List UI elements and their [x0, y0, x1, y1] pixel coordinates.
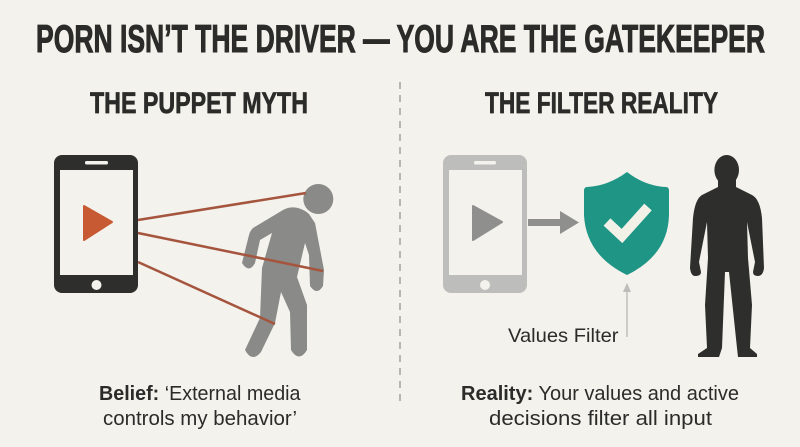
- heading: the filter reality: THE FILTER REALITY: [485, 87, 718, 120]
- heading: the puppet myth: THE PUPPET MYTH: [90, 87, 308, 120]
- caption: reality: decisions filter all input: [489, 408, 712, 430]
- caption: belief: controls my behavior’: [103, 408, 297, 430]
- panel: the puppet myth: [54, 87, 333, 430]
- arrow: phone to shield: [528, 211, 579, 234]
- icon: faded phone: [443, 155, 527, 293]
- caption: belief: [99, 383, 301, 430]
- caption: belief: Belief: ‘External media: [99, 383, 301, 405]
- icon: dark standing figure: [690, 155, 764, 357]
- label: values filter: Values Filter: [508, 325, 619, 347]
- icon: gray slumped figure: [242, 184, 333, 357]
- caption: reality: Reality: Your values and active: [461, 383, 739, 405]
- panel: the filter reality: [443, 87, 764, 430]
- caption: reality: [461, 383, 739, 430]
- icon: puppet strings: [138, 193, 323, 324]
- arrow: values filter to shield: [623, 283, 631, 337]
- icon: phone with play button: [54, 155, 138, 293]
- icon: shield with check: [584, 172, 669, 275]
